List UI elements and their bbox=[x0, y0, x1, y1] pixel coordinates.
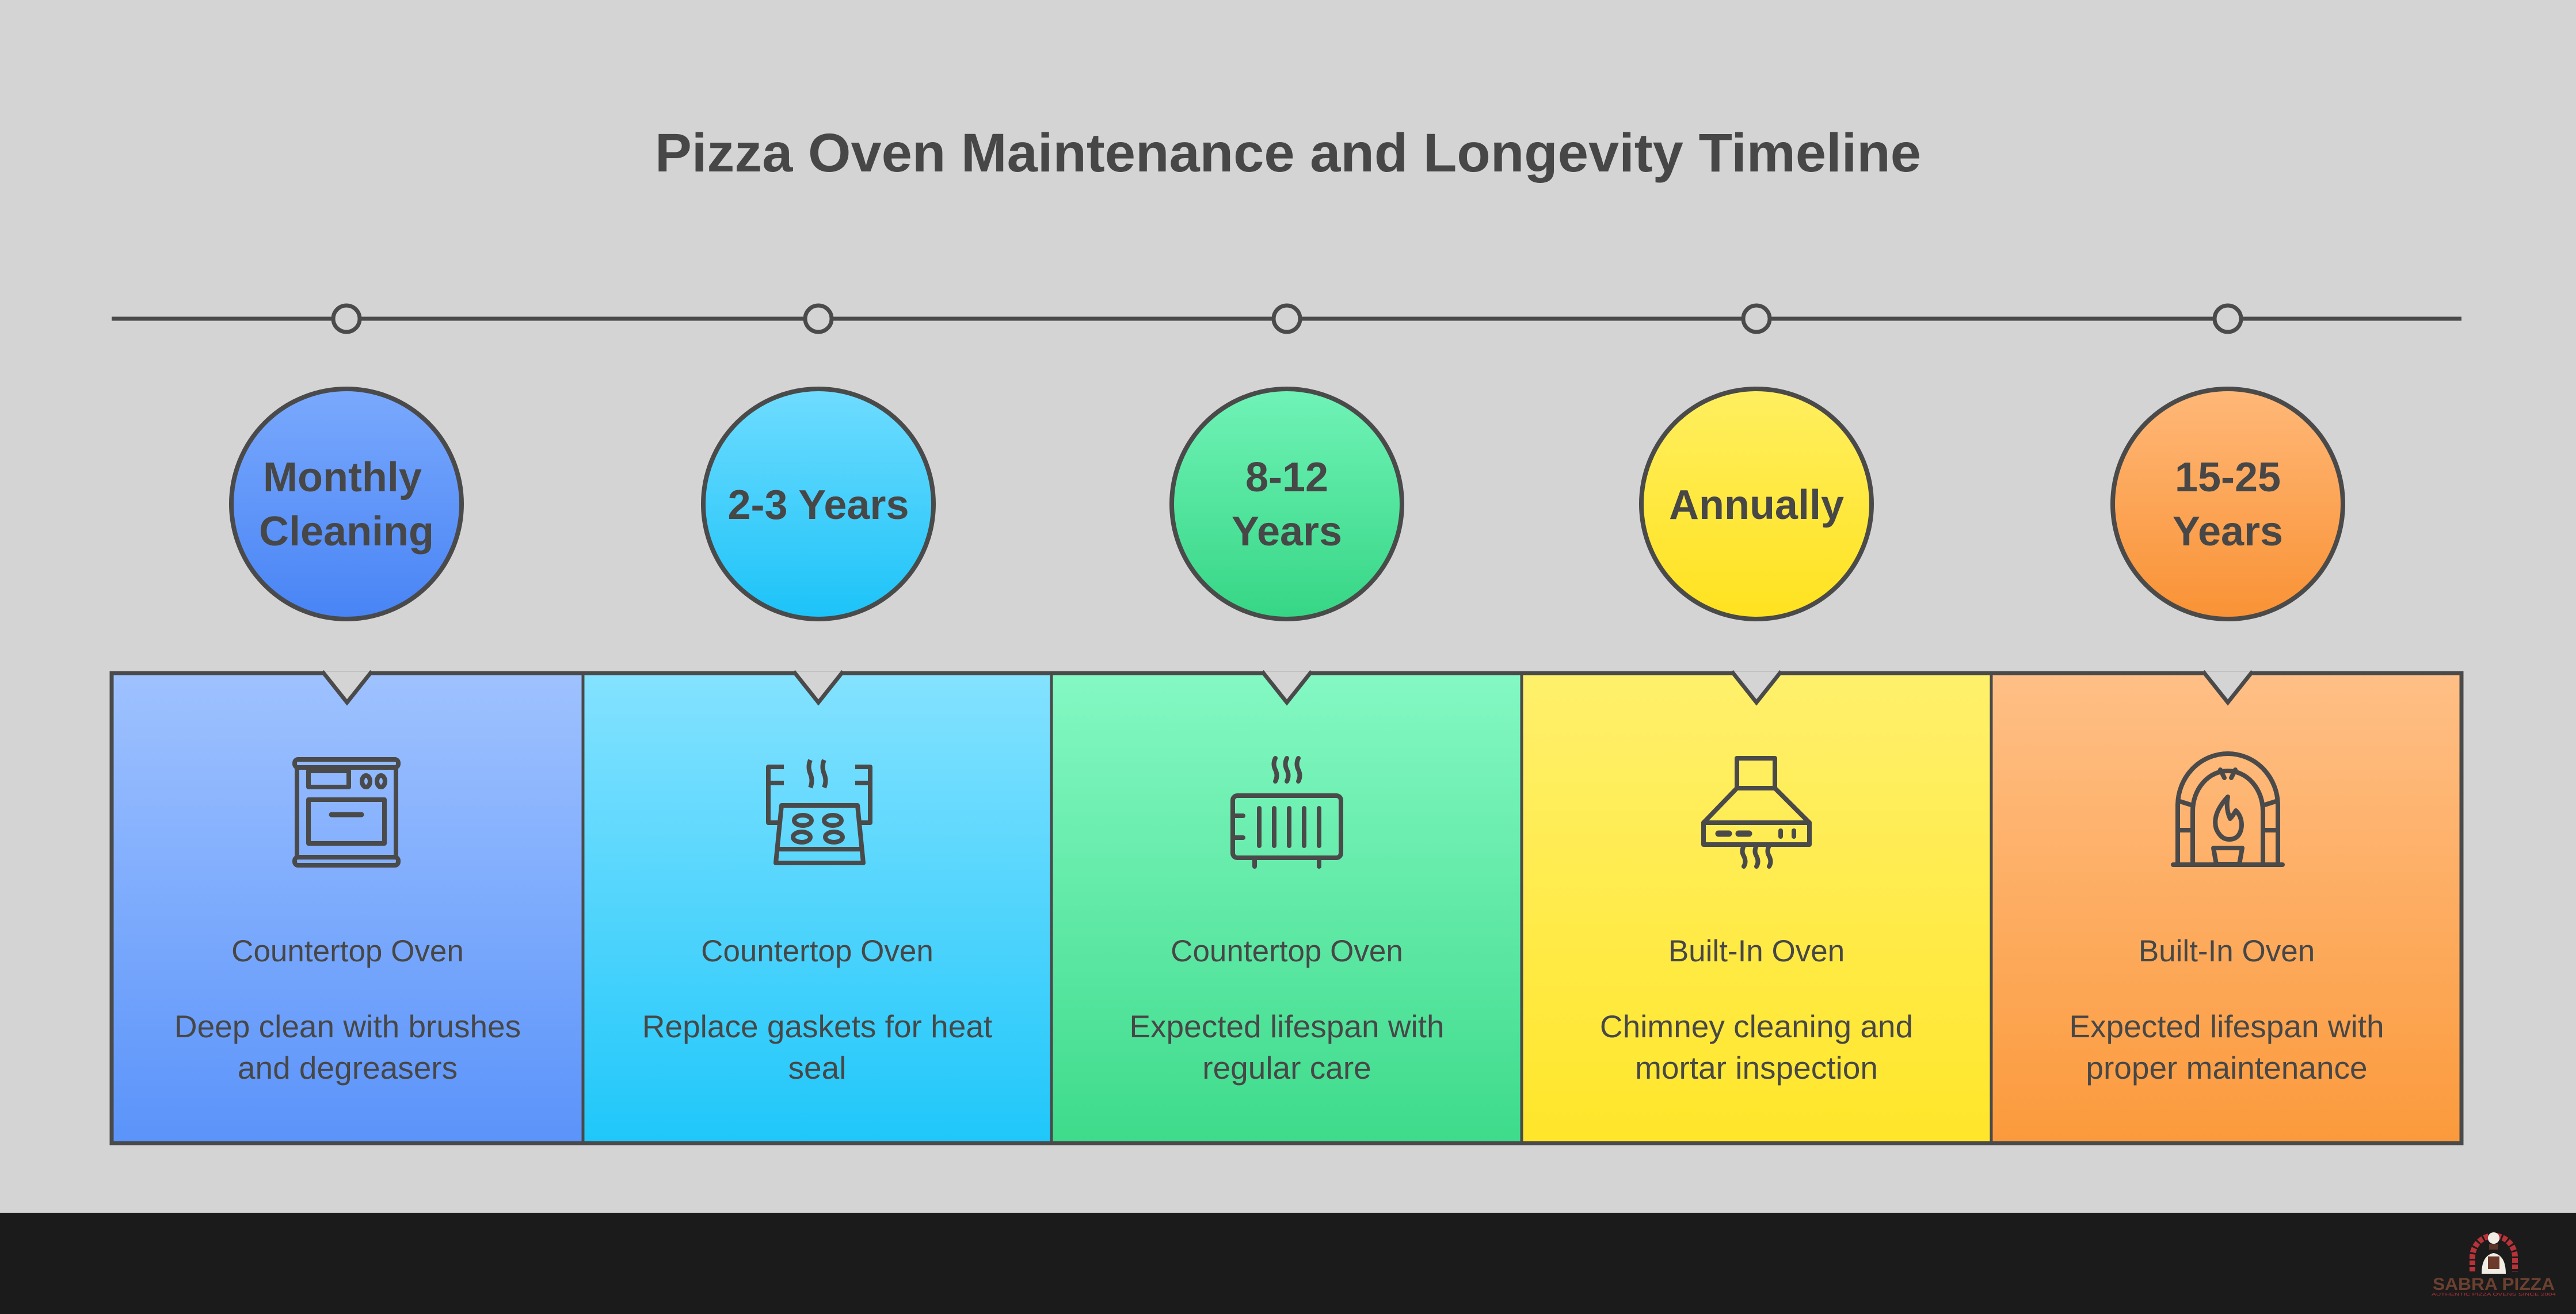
logo: sabra pizza: AUTHENTIC PIZZA OVENS SINCE 2004 bbox=[2432, 1293, 2556, 1297]
panel: annually: mortar inspection bbox=[1635, 1050, 1878, 1086]
text: description: Replace gaskets for heat bbox=[642, 1009, 992, 1044]
panel: monthly cleaning: and degreasers bbox=[238, 1050, 458, 1086]
milestone circle: 15-25 Years: Years bbox=[2173, 509, 2283, 555]
milestone circle: 8-12 Years: 8-12 bbox=[1245, 454, 1328, 501]
panels row bbox=[112, 671, 2461, 1143]
icon: oven with tray bbox=[768, 760, 870, 863]
text: built-in oven: Built-In Oven bbox=[1668, 934, 1845, 968]
text: description: Expected lifespan with bbox=[2069, 1009, 2384, 1044]
panel: monthly cleaning bbox=[112, 673, 583, 1143]
milestone circle: Annually: Annually bbox=[1669, 482, 1844, 528]
icon: countertop oven bbox=[295, 759, 398, 865]
milestone circle: 2-3 Years: 2-3 Years bbox=[728, 482, 909, 528]
milestone circle: Monthly Cleaning bbox=[231, 389, 462, 619]
milestone circle: Annually bbox=[1641, 389, 1872, 619]
timeline line bbox=[112, 305, 2461, 332]
text: description: Expected lifespan with bbox=[1129, 1009, 1445, 1044]
logo: sabra pizza: SABRA PIZZA bbox=[2433, 1275, 2555, 1294]
panel: 15-25 years: proper maintenance bbox=[2086, 1050, 2368, 1086]
milestone circle: Monthly Cleaning: Monthly bbox=[263, 454, 422, 501]
text: description: Deep clean with brushes bbox=[174, 1009, 521, 1044]
panel: 8-12 years: regular care bbox=[1202, 1050, 1371, 1086]
panel: 2-3 years bbox=[583, 673, 1051, 1143]
logo: sabra pizza bbox=[2432, 1232, 2556, 1297]
text: countertop oven: Countertop Oven bbox=[701, 934, 933, 968]
icon: brick oven bbox=[2173, 754, 2282, 865]
text: built-in oven: Built-In Oven bbox=[2139, 934, 2315, 968]
icon: heater bbox=[1233, 758, 1341, 866]
panel: annually bbox=[1522, 673, 1991, 1143]
footer band bbox=[0, 1213, 2576, 1314]
panel: 2-3 years: seal bbox=[788, 1050, 846, 1086]
icon: chimney hood bbox=[1704, 758, 1809, 866]
text: description: Chimney cleaning and bbox=[1600, 1009, 1913, 1044]
milestone circle: 8-12 Years bbox=[1172, 389, 1402, 619]
milestone circle: 15-25 Years: 15-25 bbox=[2175, 454, 2281, 501]
milestone circle: 15-25 Years bbox=[2113, 389, 2343, 619]
panel: 8-12 years bbox=[1051, 673, 1522, 1143]
milestone circle: Monthly Cleaning: Cleaning bbox=[259, 509, 434, 555]
milestone circle: 8-12 Years: Years bbox=[1232, 509, 1342, 555]
text: countertop oven: Countertop Oven bbox=[231, 934, 464, 968]
title: Pizza Oven Maintenance and Longevity Timeline bbox=[655, 123, 1921, 184]
panel: 15-25 years bbox=[1991, 673, 2461, 1143]
milestone circle: 2-3 Years bbox=[703, 389, 933, 619]
text: countertop oven: Countertop Oven bbox=[1171, 934, 1403, 968]
notches bbox=[322, 671, 2253, 702]
